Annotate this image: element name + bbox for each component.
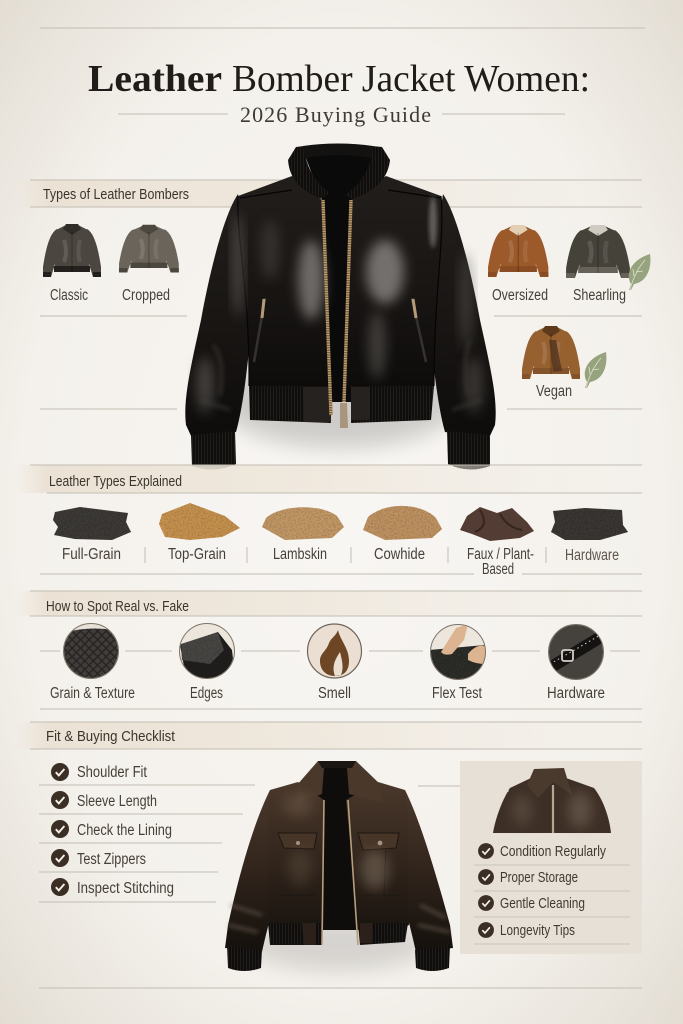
test: hardware [547,622,605,702]
cuffs [191,431,236,470]
front right [344,176,442,386]
test: flex test: Flex Test [432,685,483,702]
checklist: fit items [39,763,255,902]
care jacket [493,768,611,833]
jacket type: cropped [119,225,179,304]
care checklist: Gentle Cleaning [500,895,585,912]
jacket type: vegan: Vegan [536,383,572,400]
second jacket: brown leather [225,761,453,971]
test: smell: Smell [318,685,351,702]
panel: care [460,761,642,954]
sleeve right [427,194,496,438]
section band: leather types explained [15,465,643,493]
section band: leather types explained: Leather Types Explained [49,473,182,490]
test: grain & texture [50,620,135,702]
swatch: cowhide [363,506,442,563]
jacket type: oversized [488,225,548,304]
hero jacket: black leather bomber [185,144,496,470]
swatch: faux / plant-based: Based [482,561,514,578]
care checklist: Longevity Tips [500,922,575,939]
title block [40,28,645,100]
sleeve left [185,194,254,438]
swatch: hardware: Hardware [565,547,619,564]
care checklist: Proper Storage [500,869,578,886]
test: hardware: Hardware [547,685,605,702]
jacket type: vegan [522,326,580,400]
swatch: faux / plant-based: Faux / Plant- [467,546,534,563]
checklist: fit items: Inspect Stitching [77,880,174,897]
swatch: top-grain: Top-Grain [168,546,226,563]
swatch: cowhide: Cowhide [374,546,425,563]
section band: fit & buying checklist [15,722,643,749]
highlights [196,196,483,413]
section band: how to spot real vs. fake: How to Spot Real vs. Fake [46,598,189,615]
swatch: faux / plant-based [460,507,534,578]
checklist: fit items: Check the Lining [77,822,172,839]
jacket type: shearling: Shearling [573,287,626,304]
subtitle: 2026 Buying Guide [240,102,431,127]
pockets [254,298,265,362]
section band: fit & buying checklist: Fit & Buying Checklist [46,728,176,745]
title block: Leather [88,58,222,100]
test: edges: Edges [190,685,223,702]
connector line to care panel [418,785,484,787]
test: smell [308,624,362,702]
test: grain & texture: Grain & Texture [50,685,135,702]
jacket type: classic: Classic [50,287,88,304]
swatch: hardware [551,508,628,564]
swatch: lambskin: Lambskin [273,546,327,563]
icon: leaf (vegan) [585,352,606,388]
swatch: top-grain [159,503,240,563]
swatch: full-grain: Full-Grain [62,546,121,563]
care checklist: Condition Regularly [500,843,606,860]
test: edges [180,624,234,702]
collar [288,146,330,199]
test: flex test [430,624,487,702]
checklist: fit items: Sleeve Length [77,793,157,810]
swatch: full-grain [53,507,131,563]
zippers [323,200,331,415]
checklist: fit items: Test Zippers [77,851,146,868]
section band: types of leather bombers [15,180,643,207]
front left [238,176,331,386]
care checklist [474,843,630,944]
checklist: fit items: Shoulder Fit [77,764,148,781]
seams [238,190,442,386]
section band: types of leather bombers: Types of Leather Bombers [43,186,189,203]
title block: Bomber Jacket Women: [232,58,590,100]
hem [249,386,434,423]
jacket type: shearling [566,225,630,304]
jacket type: cropped: Cropped [122,287,170,304]
section band: how to spot real vs. fake [15,591,643,616]
icon: leaf (shearling) [629,254,650,290]
swatch: lambskin [262,507,344,563]
jacket type: classic [43,224,101,304]
lining [302,148,374,402]
jacket type: oversized: Oversized [492,287,548,304]
